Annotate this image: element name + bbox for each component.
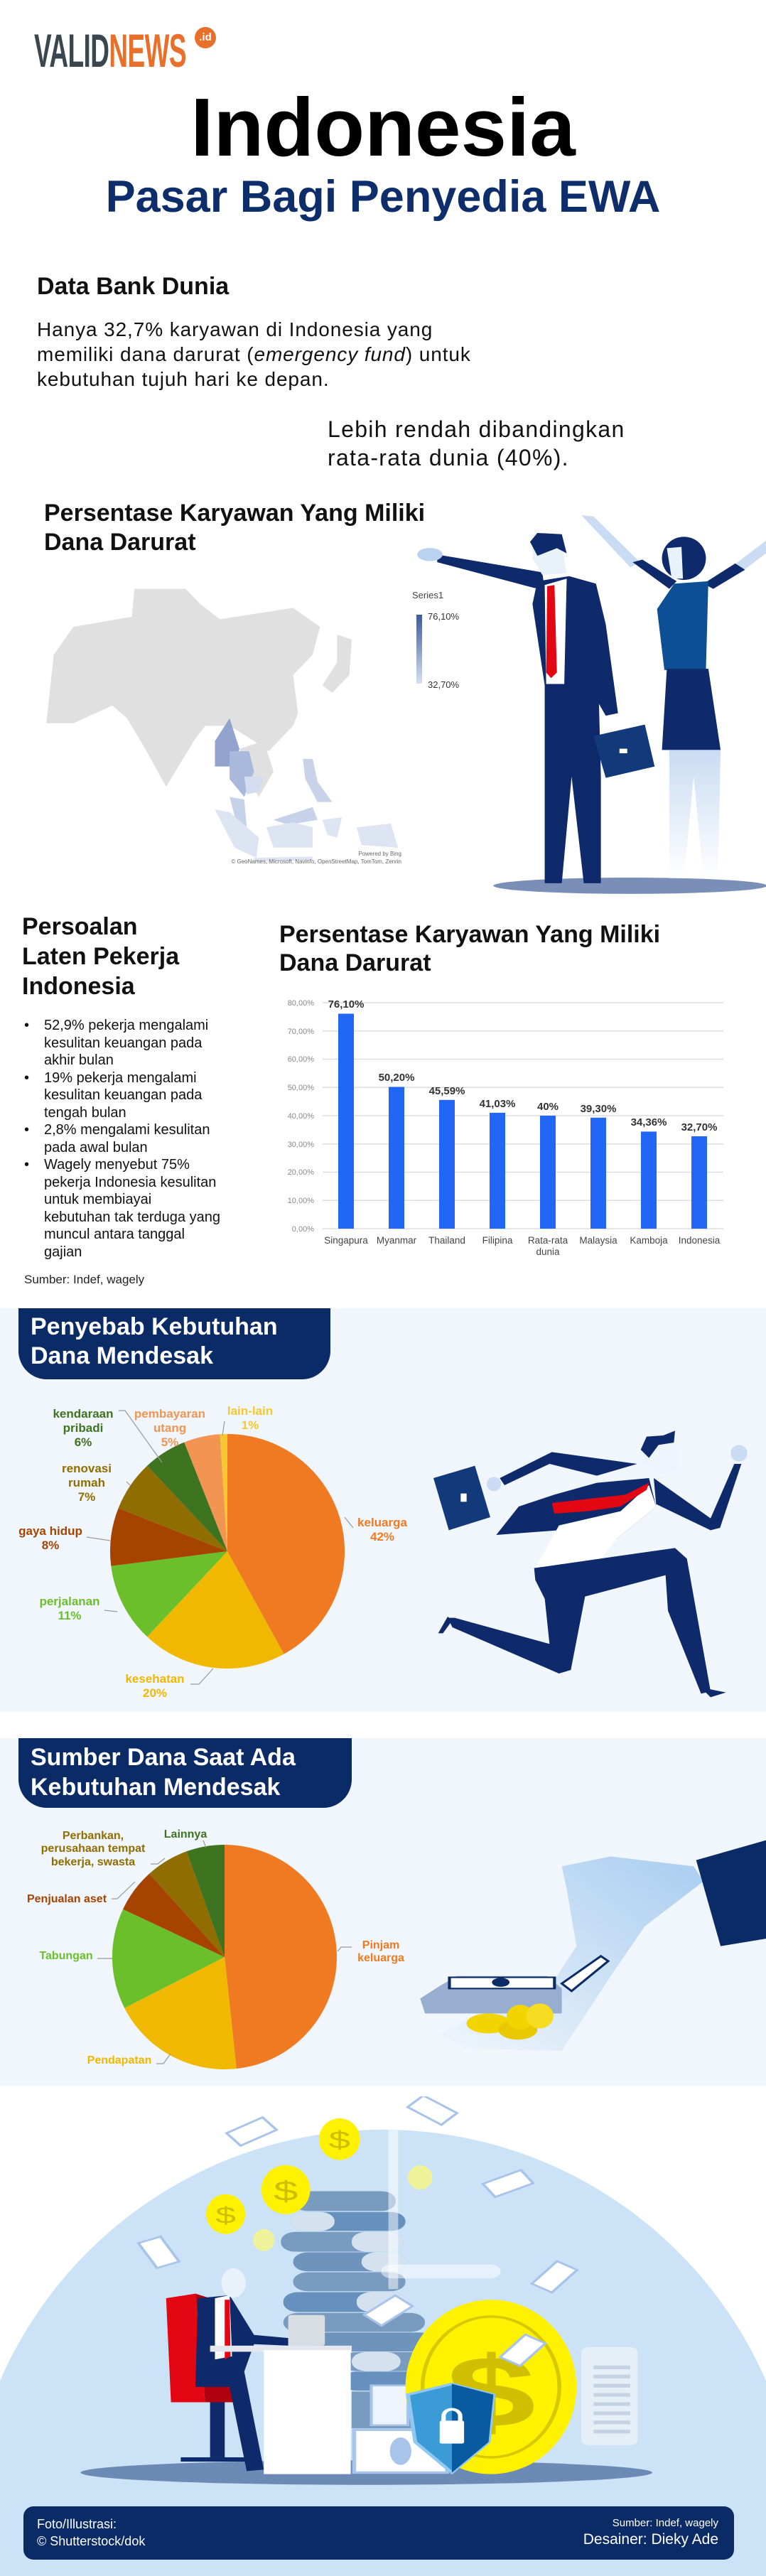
text block: bullet list: Wagely menyebut 75% [44,1157,190,1173]
bar chart: 40,00% [288,1112,314,1121]
subtitle: Pasar Bagi Penyedia EWA [106,172,660,222]
bar chart [288,998,723,1257]
text block: bullet list: • [24,1157,29,1173]
illustration: finance desk scene: $ [446,2336,536,2449]
bar chart: 60,00% [288,1055,314,1064]
text block: bullet list: pada awal bulan [44,1140,148,1155]
text block: bullet list: 19% pekerja mengalami [44,1070,197,1086]
bar chart: Filipina [482,1235,513,1246]
illustration: cheering business people [417,515,766,894]
pie chart: causes: keluarga [357,1516,408,1529]
pie chart: sources: bekerja, swasta [51,1856,135,1868]
bar chart: 70,00% [288,1028,314,1036]
footer [23,2506,734,2560]
bar chart: 50,20% [379,1072,414,1084]
pie chart: causes: 42% [370,1530,394,1543]
bar chart: Indonesia [679,1235,721,1246]
text block: bullet list: • [24,1018,29,1033]
title: Indonesia [190,81,576,173]
heading: Penyebab Kebutuhan Dana Mendesak: Penyebab Kebutuhan [31,1313,278,1340]
heading: Sumber Dana Saat Ada Kebutuhan Mendesak: Kebutuhan Mendesak [31,1774,280,1801]
text block: bullet list: pekerja Indonesia kesulitan [44,1174,216,1190]
pie chart: causes: perjalanan [39,1595,100,1608]
illustration: running businessman [433,1430,748,1697]
pie chart: causes: lain-lain [227,1404,273,1418]
bar chart: 34,36% [631,1116,667,1128]
pie chart: sources: Perbankan, [63,1830,124,1842]
bar chart: Myanmar [377,1235,417,1246]
credits [37,2517,145,2548]
bar chart: Singapura [324,1235,368,1246]
pie chart: causes: 11% [58,1609,82,1622]
pie chart: sources [27,1828,404,2069]
text block: bullet list: 2,8% mengalami kesulitan [44,1122,210,1138]
legend: Series1 [412,590,443,600]
source and designer: Sumber: Indef, wagely [613,2517,718,2529]
heading: map title: Persentase Karyawan Yang Miliki [44,500,425,527]
pie chart: causes: gaya hidup [18,1524,82,1538]
heading: Data Bank Dunia: Data Bank Dunia [37,273,229,300]
text block: bullet list: • [24,1070,29,1086]
heading: bar chart title: Dana Darurat [279,949,431,976]
heading: Persoalan Laten Pekerja Indonesia: Persoalan [22,913,138,940]
pie chart: causes: kendaraan [53,1407,114,1421]
bar chart: 80,00% [288,999,314,1008]
text block: bullet list: gajian [44,1244,82,1259]
bar chart: 40% [537,1101,559,1113]
pie chart: causes: renovasi [62,1462,112,1475]
heading: Persoalan Laten Pekerja Indonesia [22,913,179,1000]
bar chart: Thailand [428,1235,465,1246]
heading: Persoalan Laten Pekerja Indonesia: Laten Pekerja [22,943,179,970]
source note: Sumber: Indef, wagely [24,1273,144,1286]
heading: Persoalan Laten Pekerja Indonesia: Indonesia [22,973,135,1000]
text block: comparison: rata-rata dunia (40%). [328,445,569,470]
pie chart: sources: Tabungan [39,1950,93,1962]
illustration: hand with money [420,1841,766,2051]
text block: bullet list [24,1018,220,1259]
heading: map title: Dana Darurat [44,529,196,556]
bar chart: 50,00% [288,1084,314,1092]
panel: causes of urgent need [0,1308,766,1712]
text block: intro paragraph: kebutuhan tujuh hari ke depan. [37,368,330,390]
heading: bar chart title [279,921,660,976]
map attribution: © GeoNames, Microsoft, Navinfo, OpenStreetMap, TomTom, Zenrin [231,858,401,865]
text block: bullet list: • [24,1122,29,1138]
heading: Penyebab Kebutuhan Dana Mendesak: Dana Mendesak [31,1342,213,1369]
panel: sources of funds [0,1738,766,2086]
heading: bar chart title: Persentase Karyawan Yang Miliki [279,921,660,948]
pie chart: causes: 5% [161,1435,178,1449]
logo: .id [199,31,212,43]
bar chart: 20,00% [288,1168,314,1177]
pie chart: causes: 8% [42,1538,59,1552]
pie chart: causes [18,1404,408,1700]
illustration: finance desk scene [0,2096,766,2576]
bar chart: 0,00% [292,1225,314,1234]
text block: intro paragraph: Hanya 32,7% karyawan di Indonesia yang [37,318,433,340]
legend [412,590,459,690]
text block: bullet list: kebutuhan tak terduga yang [44,1209,220,1225]
pie chart: causes: 1% [242,1418,259,1432]
source and designer [583,2517,718,2548]
bar chart: 32,70% [681,1121,717,1133]
pie chart: causes: 20% [143,1686,167,1700]
illustration: finance desk scene: $ [329,2126,350,2154]
credits: © Shutterstock/dok [37,2534,145,2548]
text block: bullet list: akhir bulan [44,1052,114,1068]
text block: bullet list: muncul antara tanggal [44,1227,185,1242]
text block: bullet list: untuk membiayai [44,1192,151,1207]
map attribution [231,851,401,865]
bar chart: 45,59% [429,1085,465,1097]
text block: intro paragraph: memiliki dana darurat (emergency fund) untuk [37,343,471,365]
map: Asia choropleth [47,588,398,861]
illustration: finance desk scene: $ [274,2175,298,2206]
text block: bullet list: 52,9% pekerja mengalami [44,1018,208,1033]
pie chart: causes: 6% [75,1435,92,1449]
text block: comparison: Lebih rendah dibandingkan [328,416,625,442]
heading: Sumber Dana Saat Ada Kebutuhan Mendesak [18,1738,352,1808]
bar chart: 41,03% [480,1098,515,1110]
pie chart: sources: Penjualan aset [27,1893,107,1905]
map attribution: Powered by Bing [359,851,401,857]
pie chart: sources: Pendapatan [87,2054,151,2066]
bar chart: Malaysia [579,1235,617,1246]
pie chart: causes: kesehatan [125,1672,185,1686]
source and designer: Desainer: Dieky Ade [583,2531,718,2548]
text block: bullet list: tengah bulan [44,1104,126,1120]
pie chart: sources: keluarga [357,1952,404,1964]
text block: bullet list: kesulitan keuangan pada [44,1087,202,1103]
bar chart: 30,00% [288,1141,314,1149]
pie chart: causes: rumah [68,1476,105,1489]
pie chart: causes: utang [153,1421,186,1435]
bar chart: 76,10% [328,998,364,1011]
credits: Foto/Illustrasi: [37,2517,117,2531]
bar chart: Rata-rata [528,1235,568,1246]
bar chart: 39,30% [581,1103,616,1115]
bar chart: Kamboja [630,1235,668,1246]
heading: map title [44,500,425,556]
pie chart: causes: pembayaran [134,1407,205,1421]
text block: comparison [328,416,625,470]
bar chart: 10,00% [288,1197,314,1205]
illustration: finance desk scene: $ [215,2203,236,2229]
pie chart: sources: Pinjam [362,1939,399,1951]
heading: Sumber Dana Saat Ada Kebutuhan Mendesak: Sumber Dana Saat Ada [31,1744,296,1771]
heading: Penyebab Kebutuhan Dana Mendesak [18,1308,330,1379]
pie chart: sources: Lainnya [164,1828,207,1841]
legend: 76,10% [428,611,459,622]
text block: intro paragraph [37,318,471,390]
legend: 32,70% [428,679,459,690]
text block: bullet list: kesulitan keuangan pada [44,1035,202,1050]
pie chart: sources: perusahaan tempat [41,1843,146,1855]
bar chart: dunia [536,1246,560,1257]
pie chart: causes: 7% [78,1490,95,1504]
pie chart: causes: pribadi [63,1421,103,1435]
